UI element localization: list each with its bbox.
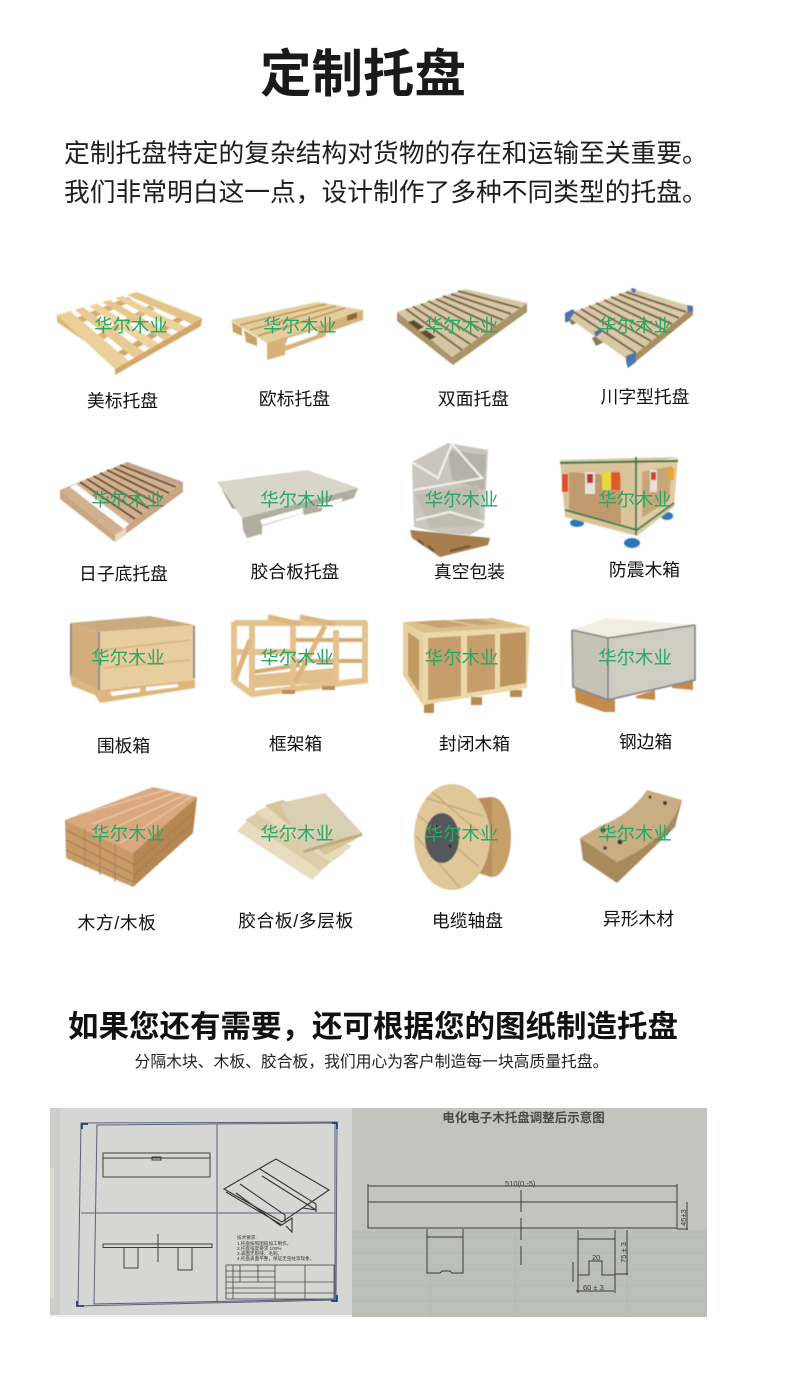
intro text: 定制托盘特定的复杂结构对货物的存在和运输至关重要。: [64, 139, 708, 168]
watermark: 华尔木业: [260, 489, 334, 510]
watermark: 华尔木业: [91, 823, 165, 844]
beam and legs: [368, 1184, 688, 1293]
panel: 胶合板托盘: [217, 470, 358, 582]
dimensions: [505, 1179, 688, 1292]
technical notes: 技术要求:: [237, 1234, 257, 1241]
label: 日子底托盘: [79, 564, 168, 584]
dimensions: 20: [592, 1253, 600, 1262]
label: 美标托盘: [87, 391, 158, 411]
front view: [103, 1153, 212, 1270]
watermark: 华尔木业: [598, 823, 672, 844]
panel: 双面托盘: [397, 289, 527, 409]
label: 围板箱: [97, 736, 150, 756]
label: 防震木箱: [609, 560, 680, 580]
panel: 防震木箱: [560, 457, 680, 580]
drawing title: 电化电子木托盘调整后示意图: [442, 1110, 605, 1125]
icon: timber stack: [65, 787, 197, 887]
panel: 钢边箱: [572, 618, 695, 752]
label: 胶合板/多层板: [238, 911, 354, 931]
icon: runner pallet: [565, 288, 693, 368]
watermark: 华尔木业: [425, 823, 498, 844]
icon: American standard pallet: [57, 292, 202, 375]
watermark: 华尔木业: [260, 647, 334, 668]
panel: 围板箱: [70, 616, 195, 756]
watermark: 华尔木业: [91, 647, 165, 668]
panel: 封闭木箱: [403, 618, 530, 754]
label: 川字型托盘: [601, 387, 689, 407]
label: 真空包装: [434, 562, 505, 582]
watermark: 华尔木业: [425, 489, 498, 510]
icon: steel-edge crate: [572, 618, 695, 712]
label: 胶合板托盘: [251, 562, 339, 582]
technical notes: 4.托盘表面平整，保证无虫蛀等现象。: [237, 1255, 314, 1262]
icon: shockproof crate: [560, 457, 678, 548]
watermark: 华尔木业: [425, 647, 498, 668]
technical notes: 1.托盘按照图纸加工制作。: [237, 1240, 291, 1247]
intro text: [64, 139, 708, 207]
dimensions: 60 ± 3: [583, 1283, 604, 1292]
label: 木方/木板: [77, 913, 157, 933]
paper: [352, 1108, 707, 1317]
dimensions: 510(0,-5): [505, 1179, 536, 1188]
technical notes: [237, 1234, 314, 1262]
panel: 电缆轴盘: [414, 784, 511, 931]
panel: 异形木材: [580, 790, 682, 929]
heading: drawings: 如果您还有需要，还可根据您的图纸制造托盘: [68, 1010, 678, 1044]
isometric view: [224, 1159, 329, 1232]
icon: frame crate: [234, 617, 368, 696]
icon: double-sided pallet: [397, 289, 527, 365]
icon: plywood pallet: [217, 470, 358, 538]
label: 双面托盘: [438, 389, 509, 409]
dimensions: 75 ± 3: [619, 1242, 628, 1263]
panel: CAD drawing scan: [50, 1108, 352, 1317]
icon: Euro pallet: [230, 302, 363, 360]
icon: collar crate: [70, 616, 195, 703]
watermark: 华尔木业: [263, 315, 337, 336]
panel: 真空包装: [410, 443, 505, 582]
watermark: 华尔木业: [425, 315, 498, 336]
watermark: 华尔木业: [598, 489, 672, 510]
watermark: 华尔木业: [91, 489, 165, 510]
panel: 欧标托盘: [230, 302, 363, 409]
panel: 川字型托盘: [565, 288, 693, 407]
icon: 日-bottom pallet: [60, 462, 183, 542]
drawing frame: [78, 1122, 337, 1306]
dimensions: 45±3: [679, 1209, 688, 1226]
label: 封闭木箱: [439, 734, 510, 754]
icon: vacuum bag on pallet: [410, 443, 490, 557]
subheading: 分隔木块、木板、胶合板，我们用心为客户制造每一块高质量托盘。: [135, 1052, 608, 1071]
technical notes: 3.表面无裂缝、毛刺。: [237, 1250, 282, 1257]
label: 钢边箱: [619, 732, 672, 752]
corner marks: [77, 1123, 337, 1306]
label: 欧标托盘: [259, 389, 330, 409]
technical notes: 2.托盘强度要求 100%: [237, 1245, 281, 1252]
watermark: 华尔木业: [598, 647, 672, 668]
label: 框架箱: [269, 734, 322, 754]
icon: closed crate: [403, 618, 530, 713]
panel: 美标托盘: [57, 292, 202, 411]
label: 电缆轴盘: [432, 911, 503, 931]
icon: shaped timber: [580, 790, 682, 883]
watermark: 华尔木业: [598, 315, 672, 336]
title block: [226, 1265, 334, 1299]
panel: 框架箱: [234, 617, 368, 754]
faint table lines: [352, 1232, 707, 1317]
title: 定制托盘: [260, 45, 466, 103]
icon: cable reel: [414, 784, 511, 890]
watermark: 华尔木业: [94, 315, 168, 336]
paper: [50, 1108, 352, 1317]
panel: 日子底托盘: [60, 462, 183, 584]
icon: plywood stack: [237, 793, 362, 880]
panel: 胶合板/多层板: [237, 793, 362, 931]
label: 异形木材: [603, 909, 674, 929]
panel: dimension drawing scan: [352, 1108, 707, 1317]
panel: 木方/木板: [65, 787, 197, 933]
intro text: 我们非常明白这一点，设计制作了多种不同类型的托盘。: [64, 178, 708, 207]
watermark: 华尔木业: [260, 823, 334, 844]
